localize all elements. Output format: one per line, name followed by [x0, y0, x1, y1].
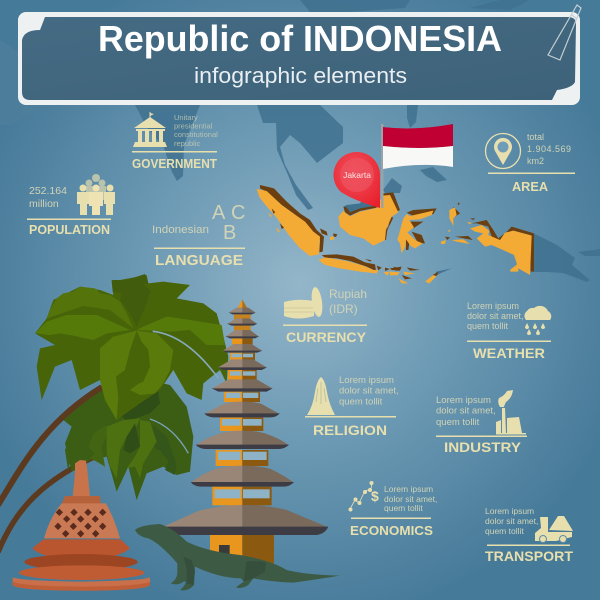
government text: Unitary [174, 113, 198, 122]
population text: 252.164 [29, 185, 67, 197]
icon: government building [133, 112, 167, 147]
panel: language [152, 202, 245, 269]
Seram and Buru [445, 236, 473, 240]
icon: people [77, 174, 115, 215]
icon: paper clip [548, 5, 581, 60]
eastern islands [390, 203, 534, 283]
currency text: (IDR) [329, 302, 358, 316]
Sumatra [260, 185, 324, 252]
Timor [433, 268, 452, 277]
panel: weather [467, 301, 551, 361]
religion text: quem tollit [339, 396, 383, 408]
icon: letters: C [231, 202, 245, 224]
area text: 1.904.569 [527, 144, 571, 154]
pagoda [162, 299, 328, 563]
panel: currency [283, 286, 367, 345]
icon: letters: B [223, 222, 236, 244]
Nusa Tenggara [390, 267, 420, 279]
weather text: dolor sit amet, [467, 311, 524, 321]
panel: population [27, 174, 115, 237]
icon: coins [284, 286, 324, 318]
religion text: Lorem ipsum [339, 375, 394, 386]
banner frame [18, 12, 580, 105]
Papua [470, 218, 534, 272]
illustration: landmarks [0, 274, 340, 591]
stupa lattice [54, 509, 106, 537]
economics text: quem tollit [384, 503, 423, 513]
Kalimantan [343, 192, 400, 240]
western islands [257, 185, 400, 276]
heading: industry: INDUSTRY [444, 439, 522, 455]
heading: government: GOVERNMENT [132, 156, 217, 171]
population text: million [29, 198, 59, 210]
panel: transport [485, 506, 573, 564]
banner [18, 5, 581, 105]
government text: republic [174, 139, 201, 148]
weather text: quem tollit [467, 321, 509, 331]
heading: language: LANGUAGE [155, 252, 243, 269]
title: Republic of INDONESIA [98, 18, 502, 59]
pin: Jakarta [333, 152, 380, 208]
heading: weather: WEATHER [473, 345, 545, 361]
pagoda bodies [210, 535, 242, 563]
panel: economics [348, 481, 437, 538]
transport text: Lorem ipsum [485, 506, 534, 516]
heading: religion: RELIGION [313, 422, 387, 438]
area text: km2 [527, 156, 544, 166]
panel: religion [305, 375, 399, 438]
heading: currency: CURRENCY [286, 329, 367, 345]
area text: total [527, 132, 544, 142]
map of Indonesia [257, 124, 534, 283]
subtitle: infographic elements [194, 63, 407, 88]
Borneo north [343, 190, 378, 215]
pagoda spire [237, 299, 242, 308]
icon: rain cloud [524, 306, 551, 335]
banner panel [22, 17, 576, 100]
language text: Indonesian [152, 224, 209, 236]
panel: government [132, 112, 218, 171]
religion text: dolor sit amet, [339, 386, 399, 396]
Java [322, 254, 376, 271]
government text: constitutional [174, 130, 218, 139]
pin: Jakarta: Jakarta [343, 170, 371, 180]
economics text: dolor sit amet, [384, 494, 437, 504]
stupa [13, 460, 150, 591]
stupa bell [44, 503, 120, 538]
palm trunk: upper [0, 387, 102, 505]
Sulawesi [405, 208, 437, 250]
palm trunk: lower [0, 451, 107, 552]
industry text: Lorem ipsum [436, 395, 491, 406]
icon: location pin [486, 134, 520, 168]
heading: economics: ECONOMICS [350, 523, 433, 538]
industry text: dolor sit amet, [436, 406, 496, 416]
heading: area: AREA [512, 180, 548, 194]
icon: chart and dollar: $ [371, 488, 379, 504]
government text: presidential [174, 122, 213, 130]
currency text: Rupiah [329, 287, 367, 301]
komodo dragon [135, 524, 340, 590]
stupa tiers [32, 539, 130, 559]
icon: factory [496, 390, 526, 434]
icon: dump truck [535, 516, 573, 542]
panel: industry [436, 390, 527, 455]
world map silhouettes [0, 0, 600, 282]
palm: lower crown [63, 375, 193, 500]
palm: upper crown [35, 274, 228, 420]
heading: transport: TRANSPORT [485, 548, 573, 564]
icon: praying hands [307, 377, 335, 415]
heading: population: POPULATION [29, 222, 110, 237]
weather text: Lorem ipsum [467, 301, 519, 311]
transport text: dolor sit amet, [485, 516, 538, 526]
flag [381, 124, 453, 208]
panel: area [486, 132, 575, 194]
pagoda roofs [162, 505, 242, 527]
economics text: Lorem ipsum [384, 484, 433, 494]
transport text: quem tollit [485, 526, 524, 536]
icon: letters: A [212, 202, 226, 224]
Halmahera [453, 203, 460, 217]
industry text: quem tollit [436, 417, 480, 428]
stupa spire [73, 460, 90, 497]
